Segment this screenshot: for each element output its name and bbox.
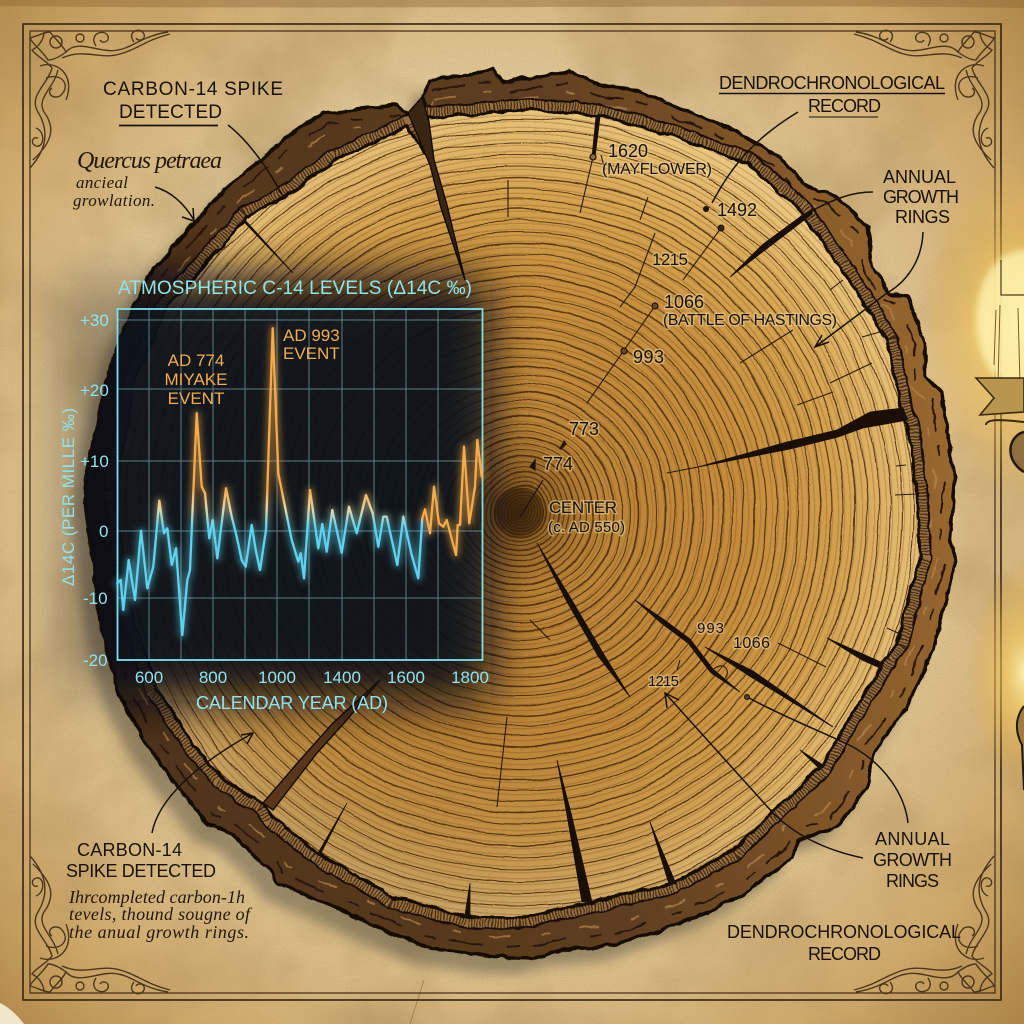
x axis labels	[135, 668, 489, 687]
chart panel: atmospheric C-14 levels	[59, 278, 489, 713]
year markers, upper radius: 1492	[717, 200, 757, 220]
year markers, upper radius: 1215	[652, 250, 688, 269]
chart title: ATMOSPHERIC C-14 LEVELS (Δ14C ‰)	[118, 278, 472, 299]
label: dendrochronological record, bottom: DENDROCHRONOLOGICAL	[727, 922, 961, 942]
crack: top split	[408, 97, 465, 280]
label: annual growth rings, bottom: GROWTH	[873, 850, 952, 870]
year markers, lower radius	[648, 620, 770, 690]
x axis labels: 600	[135, 668, 163, 687]
y axis labels: +10	[80, 452, 109, 471]
crack: wide split at lower left	[263, 680, 380, 810]
callout: AD 993 event	[283, 326, 340, 363]
label: carbon-14 spike detected, bottom: the anual growth rings.	[69, 922, 249, 942]
wood edge outline	[115, 110, 920, 918]
x axis labels: 1800	[451, 668, 489, 687]
year markers, lower radius: 1066	[733, 635, 770, 652]
bark	[84, 70, 957, 958]
y axis labels: 0	[99, 522, 108, 541]
center label: (c. AD 550)	[548, 519, 625, 536]
year markers, upper radius: (MAYFLOWER)	[602, 161, 712, 178]
icon: candle with holder, lower right	[968, 562, 1024, 790]
callout: AD 774 Miyake event: MIYAKE	[165, 370, 227, 389]
year markers, lower radius: 1215	[648, 673, 679, 690]
x axis labels: 1000	[258, 668, 296, 687]
thin ring checks	[497, 155, 917, 807]
label: carbon-14 spike detected, bottom: Ihrcompleted carbon-1h	[68, 887, 245, 907]
center label: CENTER	[549, 498, 617, 517]
label: dendrochronological record, bottom: RECORD	[808, 944, 881, 964]
label: carbon-14 spike detected, bottom	[66, 733, 253, 942]
label: carbon-14 spike detected, bottom: CARBON-14	[77, 840, 182, 860]
callout: AD 774 Miyake event: AD 774	[168, 351, 224, 370]
year markers, upper radius	[520, 141, 837, 517]
y axis labels: +20	[80, 381, 109, 400]
label: carbon-14 spike detected, bottom: SPIKE DETECTED	[66, 861, 216, 881]
growth rings	[126, 118, 914, 906]
label: annual growth rings, bottom: ANNUAL	[875, 829, 950, 849]
label: Quercus petraea: Quercus petraea	[77, 148, 222, 174]
year markers, upper radius: 1066	[664, 292, 704, 312]
disc shadow	[70, 86, 943, 974]
label: dendrochronological record, top: DENDROCHRONOLOGICAL	[719, 73, 945, 93]
label: dendrochronological record, bottom	[727, 922, 961, 964]
year markers, upper radius: 774	[543, 454, 573, 474]
label: dendrochronological record, top	[712, 73, 945, 203]
x axis labels: 1600	[387, 668, 425, 687]
icon: candle with holder, upper right	[917, 155, 1024, 495]
center label	[548, 498, 625, 536]
year markers, upper radius: 993	[633, 347, 664, 367]
callout: AD 774 Miyake event	[165, 351, 227, 408]
callout: AD 993 event: EVENT	[283, 344, 340, 363]
y axis title: Δ14C (PER MILLE ‰)	[59, 408, 78, 586]
tree cross-section	[70, 70, 960, 974]
label: annual growth rings, top: RINGS	[895, 207, 950, 227]
label: carbon-14 spike detected, top	[103, 79, 284, 198]
label: annual growth rings, top	[800, 167, 959, 347]
data line	[117, 328, 482, 635]
year markers, upper radius: 1620	[608, 141, 648, 161]
x axis labels: 1400	[323, 668, 361, 687]
year markers, upper radius: 773	[569, 419, 599, 439]
year markers, lower radius: 993	[697, 620, 724, 637]
x axis title: CALENDAR YEAR (AD)	[196, 693, 388, 713]
label: Quercus petraea	[73, 148, 222, 221]
label: annual growth rings, top: ANNUAL	[883, 167, 956, 187]
y axis labels	[80, 311, 109, 670]
cracks	[245, 117, 908, 915]
label: annual growth rings, bottom: RINGS	[886, 871, 939, 891]
label: annual growth rings, bottom	[665, 693, 952, 891]
label: dendrochronological record, top: RECORD	[808, 96, 881, 116]
y axis labels: -20	[83, 651, 108, 670]
label: carbon-14 spike detected, bottom: tevels, thound sougne of	[69, 904, 253, 924]
label: carbon-14 spike detected, top: CARBON-14 SPIKE	[103, 79, 283, 100]
label: carbon-14 spike detected, top: DETECTED	[119, 102, 222, 123]
label: Quercus petraea: growlation.	[73, 191, 155, 210]
chart backdrop shading	[20, 280, 490, 700]
x axis labels: 800	[199, 668, 227, 687]
callout: AD 993 event: AD 993	[283, 326, 340, 345]
label: annual growth rings, top: GROWTH	[883, 187, 959, 207]
year markers, upper radius: (BATTLE OF HASTINGS)	[663, 312, 837, 329]
y axis labels: +30	[80, 311, 109, 330]
wood face with rings	[150, 110, 920, 918]
y axis labels: -10	[83, 589, 108, 608]
callout: AD 774 Miyake event: EVENT	[168, 389, 224, 408]
label: Quercus petraea: ancieal	[76, 173, 128, 192]
